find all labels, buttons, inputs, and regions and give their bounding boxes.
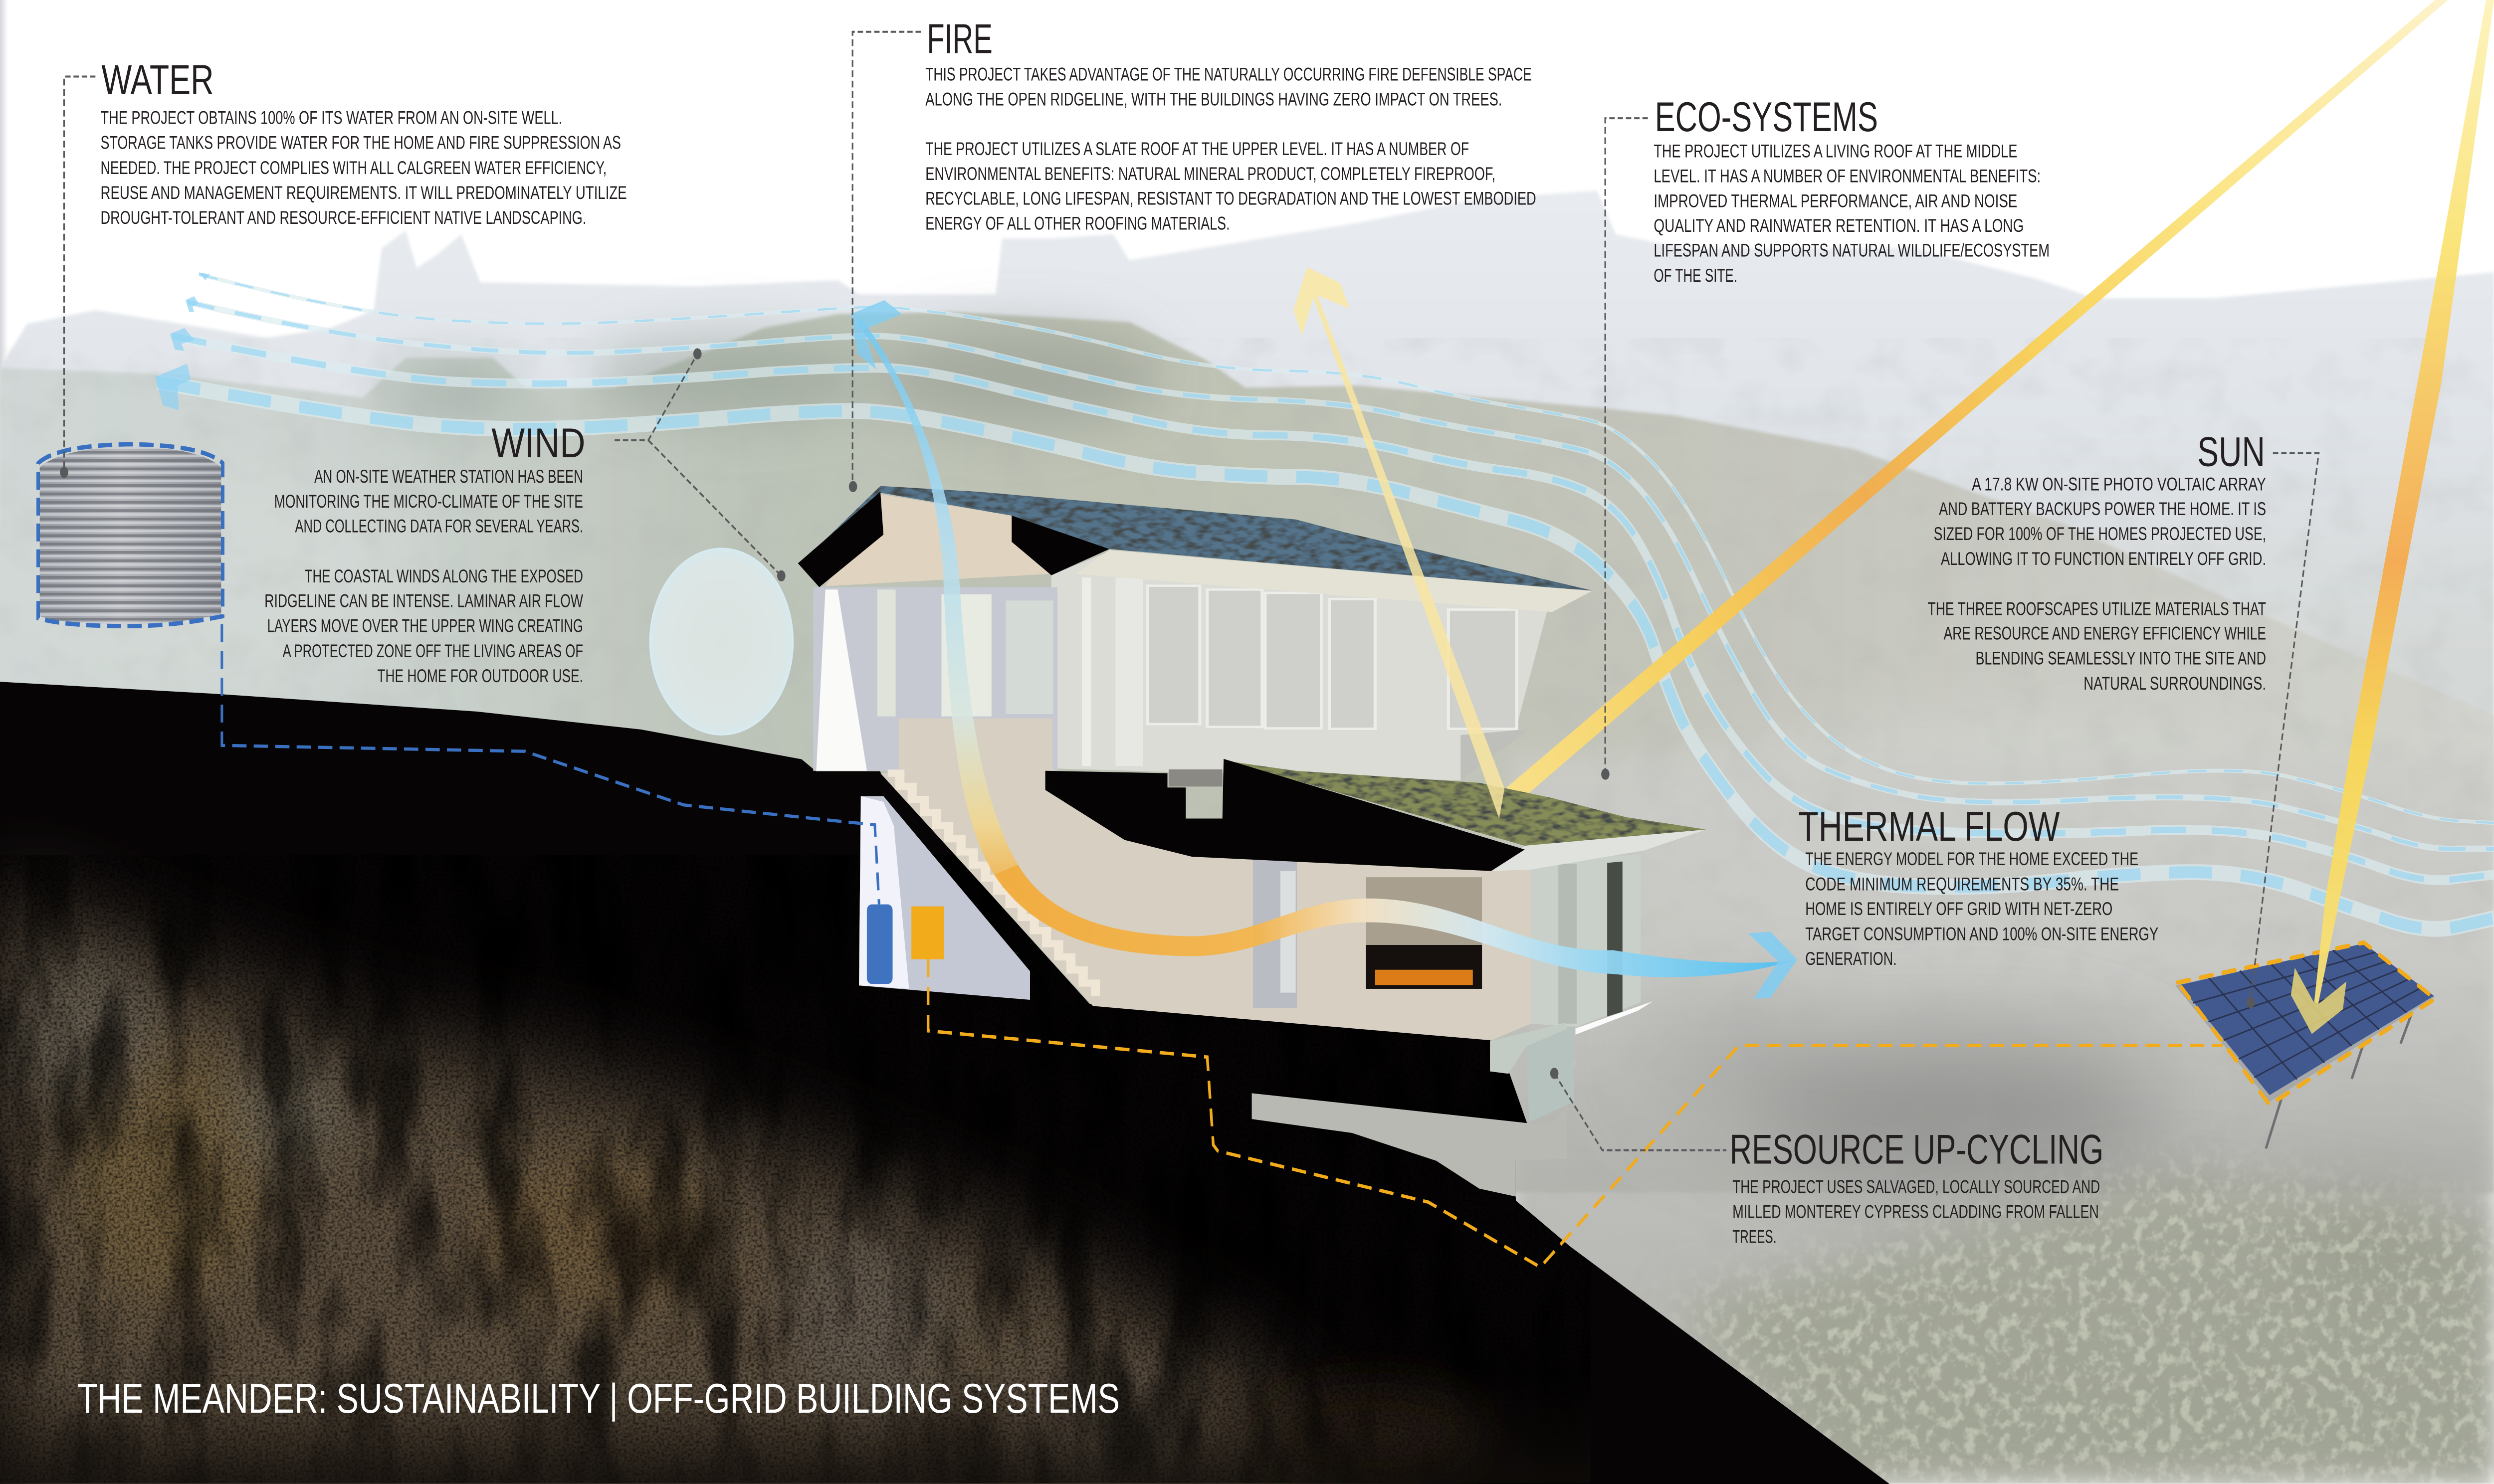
thermal flow arrow: [851, 300, 1797, 999]
eco-systems body: LIFESPAN AND SUPPORTS NATURAL WILDLIFE/ECOSYSTEM: [1654, 241, 2050, 261]
thermal flow body: THE ENERGY MODEL FOR THE HOME EXCEED THE: [1805, 849, 2138, 870]
background: hillside shading: [0, 330, 2322, 954]
solar array: [2175, 943, 2435, 1148]
resource heading: RESOURCE UP-CYCLING: [1729, 1126, 2103, 1173]
background: near hillside: [0, 312, 2494, 1193]
sun heading: SUN: [2197, 429, 2265, 476]
sun body: THE THREE ROOFSCAPES UTILIZE MATERIALS THAT: [1927, 599, 2266, 619]
lower level room and stair wall: [880, 719, 1531, 1040]
sun body: AND BATTERY BACKUPS POWER THE HOME. IT IS: [1939, 499, 2266, 520]
eco-systems body: LEVEL. IT HAS A NUMBER OF ENVIRONMENTAL BENEFITS:: [1654, 166, 2041, 186]
power line: [928, 959, 2223, 1267]
array legs: [2266, 1012, 2412, 1148]
background: distant hills and trees: [0, 191, 2494, 835]
eco-systems body: [1654, 142, 2050, 286]
fireplace: [1366, 877, 1482, 989]
sun body: [1927, 474, 2266, 694]
sun body: A 17.8 KW ON-SITE PHOTO VOLTAIC ARRAY: [1972, 474, 2266, 495]
fire body: THIS PROJECT TAKES ADVANTAGE OF THE NATURALLY OCCURRING FIRE DEFENSIBLE SPACE: [925, 64, 1532, 85]
wind body: AND COLLECTING DATA FOR SEVERAL YEARS.: [295, 516, 583, 537]
ground streaks: [0, 855, 1591, 1483]
water body: DROUGHT-TOLERANT AND RESOURCE-EFFICIENT NATIVE LANDSCAPING.: [101, 208, 586, 228]
water body: NEEDED. THE PROJECT COMPLIES WITH ALL CALGREEN WATER EFFICIENCY,: [101, 158, 607, 179]
wind band 2: [186, 296, 2494, 849]
eco-systems body: THE PROJECT UTILIZES A LIVING ROOF AT THE MIDDLE: [1654, 142, 2017, 162]
fire body: ENVIRONMENTAL BENEFITS: NATURAL MINERAL PRODUCT, COMPLETELY FIREPROOF,: [925, 164, 1495, 185]
chevron on panel: [2291, 968, 2346, 1034]
thermal flow body: [1805, 849, 2158, 969]
sun leader: [2247, 453, 2319, 1008]
house section: [798, 486, 1706, 1122]
water body: REUSE AND MANAGEMENT REQUIREMENTS. IT WILL PREDOMINATELY UTILIZE: [101, 183, 627, 203]
wind pressure sphere: [650, 549, 793, 735]
sun body: ARE RESOURCE AND ENERGY EFFICIENCY WHILE: [1944, 624, 2266, 644]
resource up-cycling text block: [1550, 1068, 2103, 1247]
background: lower right fog: [1511, 755, 2494, 1483]
panel frame: [2175, 943, 2435, 1102]
thermal flow text block: [1798, 803, 2158, 969]
living roof: [1229, 761, 1706, 846]
sloped ground section: [0, 682, 1889, 1484]
eco-systems body: IMPROVED THERMAL PERFORMANCE, AIR AND NOISE: [1654, 191, 2017, 211]
resource body: [1732, 1177, 2100, 1247]
wind body: LAYERS MOVE OVER THE UPPER WING CREATING: [267, 616, 583, 636]
water body: STORAGE TANKS PROVIDE WATER FOR THE HOME AND FIRE SUPPRESSION AS: [101, 133, 621, 153]
fire body: ALONG THE OPEN RIDGELINE, WITH THE BUILDINGS HAVING ZERO IMPACT ON TREES.: [925, 89, 1502, 110]
wind body: MONITORING THE MICRO-CLIMATE OF THE SITE: [274, 492, 583, 512]
eco-systems body: OF THE SITE.: [1654, 266, 1737, 286]
ground lower shade: [0, 1371, 1591, 1483]
concrete retaining wall: [1490, 1023, 1575, 1122]
water storage tank: [38, 444, 222, 626]
fire text block: [849, 15, 1536, 492]
panel surface: [2180, 943, 2434, 1095]
eco-systems heading: ECO-SYSTEMS: [1655, 94, 1878, 141]
eco-systems text block: [1601, 94, 2050, 780]
background: dark fog streak: [1638, 1020, 2481, 1292]
thermal flow body: TARGET CONSUMPTION AND 100% ON-SITE ENERGY: [1805, 924, 2158, 944]
black fascia right: [1012, 516, 1109, 575]
resource body: MILLED MONTEREY CYPRESS CLADDING FROM FALLEN: [1732, 1202, 2099, 1222]
water text block: [60, 56, 627, 478]
slate roof: [801, 486, 1592, 590]
background: tree canopy: [1683, 1160, 2494, 1483]
wind body: THE COASTAL WINDS ALONG THE EXPOSED: [305, 566, 583, 587]
wind band 3: [170, 328, 2494, 880]
wind bands: [155, 272, 2494, 929]
upper wing windows: [1147, 586, 1517, 729]
eco-systems leader: [1601, 118, 1648, 780]
panel grid: [2193, 950, 2422, 1079]
resource body: THE PROJECT USES SALVAGED, LOCALLY SOURCED AND: [1732, 1177, 2100, 1197]
array orange outline: [2178, 942, 2435, 1105]
fire body: [925, 64, 1536, 234]
thermal flow body: GENERATION.: [1805, 949, 1897, 969]
sun text block: [1927, 429, 2319, 1008]
sun body: BLENDING SEAMLESSLY INTO THE SITE AND: [1975, 649, 2266, 669]
wind band 4: [155, 364, 2494, 929]
thermal flow body: CODE MINIMUM REQUIREMENTS BY 35%. THE: [1805, 875, 2119, 895]
thermal flow heading: THERMAL FLOW: [1798, 803, 2060, 850]
sun ray reflected up: [1293, 267, 1504, 818]
upper roof soffit: [1076, 550, 1592, 612]
wind body: RIDGELINE CAN BE INTENSE. LAMINAR AIR FLOW: [264, 591, 584, 612]
water heading: WATER: [101, 56, 214, 103]
wind body: [264, 467, 584, 687]
resource leader: [1550, 1068, 1726, 1150]
wind text block: [264, 348, 786, 687]
middle slab section: [1045, 759, 1525, 871]
resource body: TREES.: [1732, 1227, 1777, 1247]
inverter: [911, 907, 944, 959]
stair treads: [888, 773, 1095, 996]
water leader: [60, 76, 95, 478]
arrowhead up: [851, 300, 902, 370]
water body: [101, 108, 627, 228]
wind heading: WIND: [491, 420, 585, 467]
wind band 1: [199, 272, 2494, 823]
thermal flow body: HOME IS ENTIRELY OFF GRID WITH NET-ZERO: [1805, 899, 2112, 920]
sun ray from sky to living roof: [1499, 0, 2448, 819]
sun ray to solar array: [2291, 0, 2494, 1034]
lower room door: [1253, 859, 1297, 1008]
sun body: NATURAL SURROUNDINGS.: [2083, 674, 2266, 694]
fire body: RECYCLABLE, LONG LIFESPAN, RESISTANT TO DEGRADATION AND THE LOWEST EMBODIED: [925, 189, 1536, 209]
slab niche: [1169, 769, 1223, 786]
water body: THE PROJECT OBTAINS 100% OF ITS WATER FROM AN ON-SITE WELL.: [101, 108, 562, 129]
arrowhead right: [1748, 931, 1797, 999]
upper wing walls: [813, 552, 1552, 780]
title: THE MEANDER: SUSTAINABILITY | OFF-GRID BUILDING SYSTEMS: [77, 1375, 1120, 1422]
wind body: A PROTECTED ZONE OFF THE LIVING AREAS OF: [283, 641, 583, 662]
fire body: THE PROJECT UTILIZES A SLATE ROOF AT THE UPPER LEVEL. IT HAS A NUMBER OF: [925, 139, 1469, 160]
fire leader: [849, 32, 921, 492]
fire heading: FIRE: [927, 15, 993, 62]
wind leader: [615, 348, 786, 581]
fire body: ENERGY OF ALL OTHER ROOFING MATERIALS.: [925, 213, 1230, 234]
battery storage: [867, 905, 893, 984]
concrete foundation below house: [1252, 1093, 1567, 1197]
wind body: THE HOME FOR OUTDOOR USE.: [377, 666, 583, 687]
lower wing glazing: [1531, 854, 1653, 1035]
eco-systems body: QUALITY AND RAINWATER RETENTION. IT HAS A LONG: [1654, 216, 2024, 236]
ground grain: [0, 855, 1591, 1483]
sun body: ALLOWING IT TO FUNCTION ENTIRELY OFF GRID.: [1941, 549, 2266, 569]
background: left paper edge: [0, 0, 8, 1484]
background: mist mottling: [0, 338, 2494, 1483]
black fascia left: [798, 492, 883, 587]
blue tank outline: [38, 444, 222, 626]
mechanical room: [859, 796, 1030, 1000]
timber soffit: [826, 494, 1051, 586]
sun body: SIZED FOR 100% OF THE HOMES PROJECTED USE,: [1934, 524, 2266, 545]
middle roof soffit: [1491, 829, 1706, 871]
water supply line: [222, 624, 879, 905]
ground texture: [0, 855, 1591, 1483]
wind body: AN ON-SITE WEATHER STATION HAS BEEN: [314, 467, 583, 487]
arrowhead: [1293, 267, 1349, 336]
